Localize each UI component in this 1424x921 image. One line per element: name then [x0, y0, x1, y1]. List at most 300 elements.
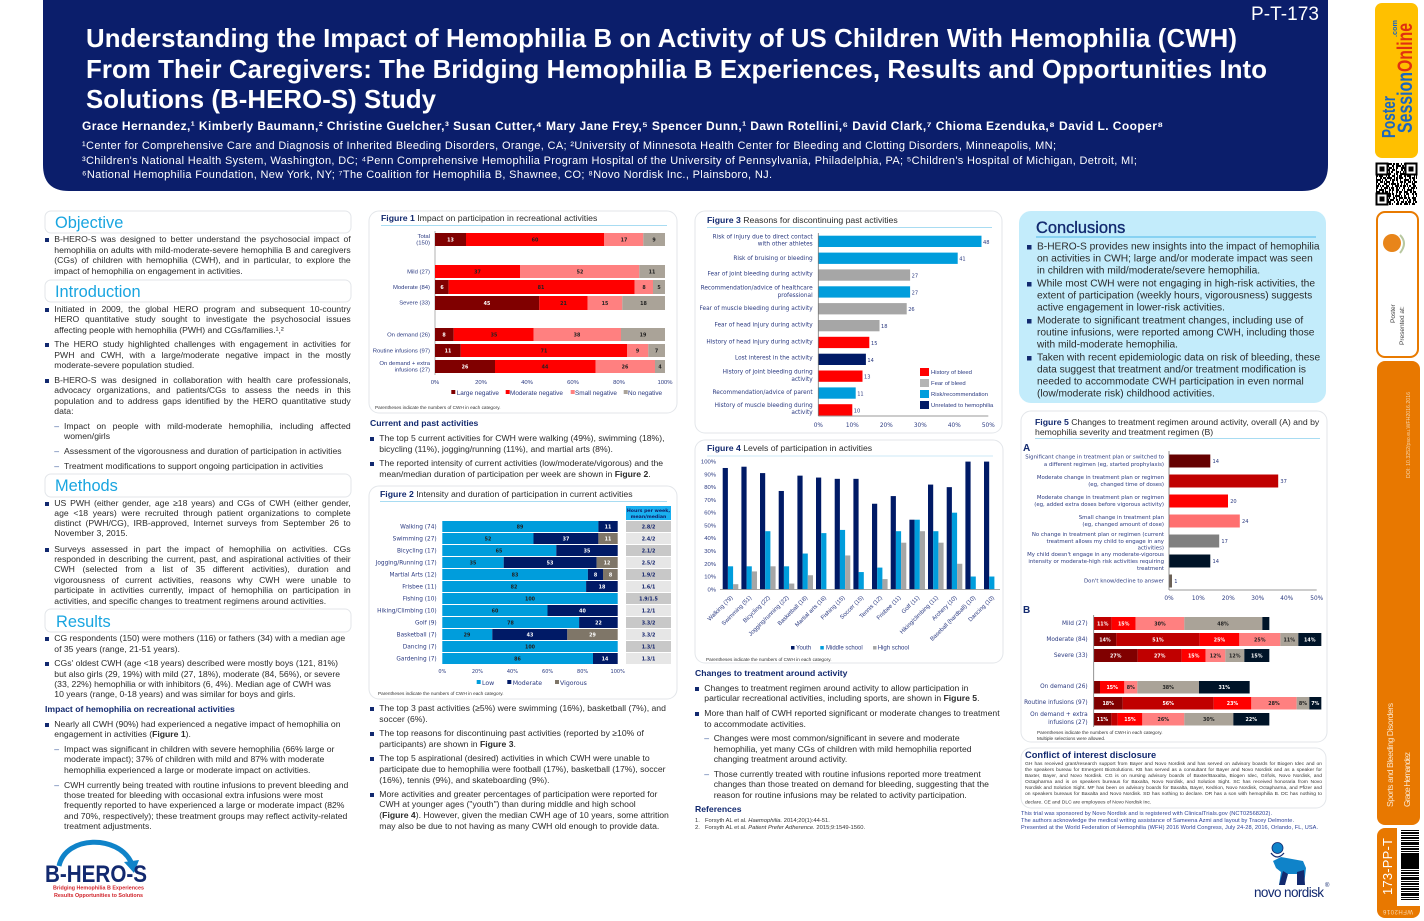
introduction text: population and to address gaps identified by the HERO quantitative study — [54, 396, 351, 406]
figure 4 category labels: Basketball (18) — [777, 595, 809, 627]
figure 5A labels: My child doesn't engage in any moderate-vigorous — [1027, 552, 1164, 558]
panel: introduction — [45, 280, 351, 471]
figure 4 category labels: Jogging/running (22) — [748, 595, 790, 638]
figure 2 legend: Low — [482, 680, 494, 687]
figure 2 stacked bars: 29 — [464, 633, 471, 639]
figure 3 labels: activity — [791, 410, 813, 416]
sidebar: PosterSessionOnline badge: Online — [1394, 23, 1417, 72]
figure 2 stacked bars: 14 — [602, 657, 609, 663]
impact text: – — [54, 744, 59, 754]
conflict text: declare. CE and DLC are employees of Novo Nordisk Inc. — [1025, 799, 1151, 805]
methods text: responded in describing the current, past, and aspirational activities of their — [54, 554, 351, 564]
header banner — [43, 0, 1328, 191]
figure 1 stacked bars: 17 — [621, 238, 627, 244]
figure 5B bars: 51% — [1152, 638, 1164, 644]
figure 4 category labels: Swimming (51) — [721, 595, 753, 627]
figure 5B labels: On demand (26) — [1040, 684, 1088, 690]
introduction text: Treatment modifications to support ongoing participation in activities — [64, 461, 323, 471]
heading: introduction: Introduction — [55, 283, 141, 301]
figure 4 y axis: 20% — [704, 562, 717, 568]
introduction text: – — [54, 461, 59, 471]
figure 5A axis — [1164, 451, 1324, 602]
methods text: participate in activities currently, impact of hemophilia on participation in — [54, 584, 351, 594]
figure 2 note: Parentheses indicate the numbers of CWH in each category. — [378, 691, 504, 696]
figure 1 stacked bars: 44 — [542, 364, 549, 370]
panel: figure 4 — [695, 440, 1003, 663]
figure 1 row labels: infusions (27) — [395, 368, 430, 374]
figure 1 x axis: 0% — [431, 380, 440, 386]
logo: B-HERO-S: B-HERO-S — [45, 861, 147, 888]
figure 3 labels: Fear of muscle bleeding during activity — [700, 306, 813, 312]
figure 1 x axis: 100% — [657, 380, 673, 386]
sidebar: presented at box: Poster — [1390, 303, 1397, 323]
figure 5A axis: 20% — [1222, 596, 1235, 602]
objective text: hemophilia on adults with mild-moderate-severe hemophilia B and caregivers — [54, 244, 351, 254]
conflict text: on speakers bureaus for Baxalta and Novo Nordisk. SD has nothing to declare. DR has a son with hemophilia B. DC has nothing to — [1025, 792, 1322, 797]
conflict text: GH has received grant/research support from Bayer and Novo Nordisk and has served on advisory boards for Biogen Idec and on — [1025, 762, 1322, 767]
figure 5B bars: 27% — [1154, 654, 1166, 660]
text: past activities: soccer (6%). — [379, 714, 428, 724]
figure 5A labels: Moderate change in treatment plan or regimen — [1037, 475, 1164, 481]
figure 5A bars: 17 — [1221, 539, 1228, 545]
figure 2 stacked bars: 18 — [599, 585, 606, 591]
figure 1 stacked bars: 71 — [541, 348, 547, 354]
figure 3 labels: History of muscle bleeding during — [715, 403, 813, 409]
hours per week table: mean/median — [631, 514, 666, 520]
figure 5B bars: 11% — [1097, 717, 1108, 723]
figure 5B bars: 11% — [1284, 638, 1295, 644]
figure 5 title: Figure 5 Changes to treatment regimen around activity, overall (A) and by — [1035, 417, 1320, 427]
figure 5B bars: 15% — [1118, 622, 1130, 628]
hours per week table: 1.9/1.5 — [639, 597, 658, 603]
figure 4 category labels — [707, 595, 996, 643]
methods text: vigorousness of current activities, reasons why CWH were unable to — [54, 574, 351, 584]
text: changes to treatment around activity: – — [704, 769, 709, 779]
figure 2 title: Figure 2 Intensity and duration of participation in current activities — [380, 489, 633, 499]
text: past activities — [370, 703, 669, 831]
conclusions text: routine infusions, were reported among CWH, including those — [1037, 328, 1315, 338]
figure 5B bars: 7% — [1311, 701, 1320, 707]
figure 3 bars: 48 — [983, 240, 989, 246]
introduction text: Impact on people with mild-moderate hemophilia, including affected — [64, 420, 351, 430]
figure 3 labels: Fear of head injury during activity — [714, 323, 813, 329]
figure 2 x axis: 100% — [611, 669, 625, 675]
figure 1 note: Parentheses indicate the numbers of CWH in each category. — [375, 405, 500, 410]
figure 5B bars: 18% — [1102, 701, 1114, 707]
figure 1 stacked bars: 52 — [577, 270, 583, 276]
hours per week table: 1.2/1 — [642, 609, 655, 615]
figure 1 x axis: 20% — [475, 380, 488, 386]
figure 3 labels: Risk of injury due to direct contact — [713, 235, 813, 241]
title: Understanding the Impact of Hemophilia B on Activity of US Children With Hemophilia (CWH) — [86, 25, 1237, 53]
figure 5A axis: 10% — [1192, 596, 1205, 602]
panel: figure 5 — [1021, 411, 1327, 742]
figure 3 bars: 13 — [864, 375, 870, 381]
text: changes to treatment around activity: Changes to treatment regimen around activity to allow participation in — [704, 683, 969, 693]
figure 5A labels — [1025, 455, 1165, 585]
figure 2 row labels: Fishing (10) — [403, 596, 437, 602]
figure 1 stacked bars: 11 — [445, 348, 451, 354]
introduction text — [45, 304, 351, 471]
figure 5A labels: a different regimen (eg, started prophylaxis) — [1044, 462, 1164, 468]
references — [695, 804, 865, 831]
conclusions text: in children with mild/moderate/severe hemophilia. — [1037, 266, 1260, 276]
figure 2 stacked bars: 60 — [492, 609, 499, 615]
figure 1 x axis: 80% — [613, 380, 626, 386]
results text: 10 years (range, 0-18 years) and was similar for boys and girls. — [54, 689, 295, 699]
impact text — [45, 719, 349, 831]
introduction text: Assessment of the vigorousness and duration of participation in activities — [64, 446, 342, 456]
figure 2 stacked bars: 11 — [605, 525, 611, 531]
figure 3 bars: 10 — [854, 408, 860, 414]
objective text — [45, 234, 351, 276]
methods text: CWH (selected from a list of 35 different activities), duration and — [54, 564, 351, 574]
text: current and past activities: Current and past activities — [370, 418, 479, 428]
figure 5A bars: 14 — [1212, 559, 1219, 565]
figure 3 legend: Risk/recommendation — [931, 392, 988, 398]
text: changes to treatment around activity: – — [704, 733, 709, 743]
figure 5B bars: 14% — [1099, 638, 1111, 644]
figure 5B bars: 25% — [1254, 638, 1266, 644]
figure 1 stacked bars: 35 — [491, 332, 497, 338]
figure 4 category labels: Frisbee (11) — [876, 595, 902, 622]
figure 4 legend: Youth — [796, 646, 811, 652]
sidebar: poster ID and barcode: WFH2016 — [1382, 908, 1413, 914]
figure 5A labels: treatment — [1137, 566, 1164, 572]
figure 3 labels: Recommendation/advice of healthcare — [701, 286, 813, 292]
figure 2 row labels: Bicycling (17) — [397, 548, 437, 554]
conclusions text: Taken with recent epidemiologic data on risk of bleeding, these — [1037, 352, 1320, 364]
figure 2 stacked bars: 86 — [514, 657, 521, 663]
introduction text: The HERO study highlighted challenges with engagement in activities for — [54, 338, 351, 348]
figure 5B bars: 15% — [1251, 654, 1263, 660]
figure 2 legend: Vigorous — [560, 680, 587, 687]
sidebar: PosterSessionOnline badge: .com — [1392, 20, 1399, 37]
conclusions text: extent of participation (weekly hours, vigorousness) suggests — [1037, 290, 1312, 302]
figure 2 x axis: 20% — [472, 669, 483, 675]
figure 2 row labels — [375, 524, 437, 662]
figure 2 x axis: 80% — [577, 669, 588, 675]
introduction text: – — [54, 421, 59, 431]
figure 1 stacked bars: 38 — [574, 332, 581, 338]
figure 4 category labels: Martial arts (16) — [794, 595, 828, 629]
figure 3 labels: Lost interest in the activity — [735, 356, 813, 362]
figure 5A bars: 20 — [1230, 499, 1237, 505]
figure 2 stacked bars: 89 — [517, 525, 524, 531]
figure 1 stacked bars: 6 — [440, 285, 444, 291]
figure 5A axis: 40% — [1280, 596, 1294, 602]
text: changes to treatment around activity: Changes to treatment around activity — [695, 668, 848, 678]
logo: novo nordisk — [1254, 842, 1330, 900]
impact text: those treated for bleeding with occasional extra infusions were most — [64, 790, 323, 800]
figure 2 row labels: Hiking/Climbing (10) — [377, 608, 437, 614]
introduction text: PWH and CWH, with a large/moderate negative impact in the mostly — [54, 350, 351, 360]
figure 5A labels: (eg, added extra doses before vigorous activity) — [1034, 502, 1164, 508]
conclusions text: B-HERO-S provides new insights into the impact of hemophilia — [1037, 242, 1320, 252]
figure 4 y axis: 90% — [704, 472, 717, 478]
figure 2 x axis: 60% — [542, 669, 553, 675]
methods text: activities, and specific changes to treatment regimens around activities. — [54, 596, 326, 606]
figure 5B bars: 12% — [1229, 654, 1241, 660]
references: References — [695, 804, 742, 814]
figure 3 labels: Recommendation/advice of parent — [712, 390, 813, 396]
impact text: moderate impact); 37% of children with mild and 87% with moderate — [64, 754, 325, 764]
hours per week table: 2.5/2 — [642, 561, 655, 567]
figure 2 row labels: Jogging/Running (17) — [375, 560, 437, 566]
methods text: Surveys assessed in part the impact of hemophilia on activities. CGs — [54, 544, 351, 554]
figure 5B bars: 8% — [1299, 701, 1307, 707]
figure 5A bars: 24 — [1242, 519, 1248, 525]
panel: figure 2 — [369, 486, 677, 699]
conclusions text: active engagement in lower-risk activities. — [1037, 302, 1225, 314]
figure 2 stacked bars: 43 — [527, 633, 533, 639]
figure 2 stacked bars: 29 — [589, 633, 596, 639]
figure 4 category labels: Golf (11) — [901, 595, 921, 615]
figure 2 row labels: Basketball (7) — [397, 632, 437, 638]
figure 2 x axis: 40% — [507, 669, 518, 675]
figure 3 bars: 27 — [912, 290, 918, 296]
figure 1 stacked bars: 13 — [447, 238, 454, 244]
figure 4 category labels: Walking (79) — [707, 595, 734, 623]
icon: WFH congress logo — [1383, 234, 1404, 253]
introduction text: B-HERO-S was designed in collaboration with health care professionals, — [54, 374, 351, 384]
figure 5A bars: 14 — [1212, 459, 1219, 465]
figure 1 title: Figure 1 Impact on participation in recreational activities — [381, 213, 598, 223]
figure 3 axis — [814, 233, 995, 429]
figure 1 row labels: On demand (26) — [387, 332, 430, 338]
impact text: frequently reported to have experienced a large or moderate impact (82% — [64, 800, 345, 810]
methods text: November 3, 2015. — [54, 528, 128, 538]
conclusions text — [1027, 242, 1320, 400]
figure 2 row labels: Frisbee (11) — [402, 584, 437, 590]
figure 3 axis: 10% — [846, 423, 859, 429]
panel: results — [45, 609, 351, 831]
objective text: B-HERO-S was designed to better understand the psychosocial impact of — [54, 234, 351, 244]
objective text: (CGs) of children with hemophilia (CWH), and in particular, to explore the — [54, 254, 351, 264]
hours per week table: 2.1/2 — [642, 549, 655, 555]
figure 2 stacked bars: 12 — [604, 561, 610, 567]
introduction text: affecting people with hemophilia (PWH) and CGs/families.¹,² — [54, 325, 284, 335]
figure 2 stacked bars: 37 — [563, 537, 569, 543]
figure 2 row labels: Walking (74) — [400, 524, 437, 530]
introduction text: moderate-severe population studied. — [54, 360, 194, 370]
section B label: B — [1023, 605, 1030, 616]
figure 5B bars: 15% — [1188, 654, 1200, 660]
text: changes to treatment around activity: particular recreational activities, including sports, are shown in Figure 5. — [704, 693, 979, 703]
conclusions text: (low/moderate risk) childhood activities. — [1037, 388, 1215, 400]
figure 5A labels: Moderate change in treatment plan or regimen — [1037, 495, 1164, 501]
figure 1 stacked bars: 19 — [640, 332, 647, 338]
sidebar: poster ID and barcode — [1377, 827, 1424, 918]
figure 1 row labels: Severe (33) — [399, 300, 430, 306]
figure 1 row labels: On demand + extra — [379, 361, 431, 367]
text: changes to treatment around activity: changes than those treated on demand for bleeding, suggesting that the — [714, 779, 989, 789]
figure 5A axis: 30% — [1251, 596, 1265, 602]
figure 4 y axis — [701, 460, 717, 593]
text: past activities: (Figure 4). However, given the median CWH age of 10 years, some attrition — [379, 810, 669, 820]
methods text: age <18 years) were recruited through patient organizations to complete — [54, 508, 351, 518]
figure 5B labels: Routine infusions (97) — [1024, 700, 1088, 706]
text: past activities: may also be due to not having as many CWH old enough to provide data. — [379, 821, 659, 831]
figure 1 stacked bars: 60 — [532, 238, 539, 244]
figure 5B bars: 8% — [1127, 685, 1135, 691]
sidebar: presented at box — [1377, 212, 1418, 357]
figure 3 bars: 26 — [908, 307, 915, 313]
hours per week table: 1.3/1 — [642, 657, 655, 663]
figure 5B bars — [1094, 617, 1321, 726]
impact text: engagement in activities (Figure 1). — [54, 729, 191, 739]
text: current and past activities: mean/median duration of participation per week are shown in Figure 2. — [379, 469, 651, 479]
figure 4 note: Parentheses indicate the numbers of CWH in each category. — [706, 657, 832, 662]
title — [86, 25, 1267, 114]
sidebar: orange category panel: Sports and Bleeding Disorders — [1385, 703, 1395, 807]
figure 5B bars: 15% — [1106, 685, 1118, 691]
figure 3 legend: Unrelated to hemophilia — [931, 403, 994, 409]
figure 2 row labels: Martial Arts (12) — [389, 572, 437, 578]
figure 5B labels: Moderate (84) — [1046, 637, 1088, 643]
figure 5 title: hemophilia severity and treatment regimen (B) — [1035, 427, 1213, 437]
references: Forsyth AL et al. Patient Prefer Adherence. 2015;9:1549-1560. — [705, 825, 865, 831]
results text: of 35 years (range, 21-51 years). — [54, 644, 180, 654]
figure 5B bars: 30% — [1203, 717, 1215, 723]
figure 2 stacked bars: 35 — [584, 549, 590, 555]
figure 2 x axis — [438, 669, 625, 675]
figure 2 stacked bars: 22 — [595, 621, 602, 627]
introduction text: Initiated in 2009, the global HERO program and subsequent 10-country — [54, 304, 351, 314]
figure 1 row labels: (150) — [416, 240, 430, 246]
figure 3 labels: with other athletes — [758, 242, 813, 248]
affiliations — [82, 140, 1137, 181]
results text: but also girls (29, 19%) with mild (27, 18%), moderate (84, 56%), or severe — [54, 669, 340, 679]
figure 3 title: Figure 3 Reasons for discontinuing past activities — [707, 215, 898, 225]
figure 2 row labels: Gardening (7) — [396, 656, 437, 662]
sponsorship and acknowledgements: Presented at the World Federation of Hemophilia (WFH) 2016 World Congress, July 24-28, 2016, Orlando, FL, USA. — [1021, 825, 1318, 831]
figure 3 bars — [818, 236, 989, 416]
authors: Grace Hernandez,¹ Kimberly Baumann,² Christine Guelcher,³ Susan Cutter,⁴ Mary Jane Frey,⁵ Spencer Dunn,¹ Dawn Rotellini,⁶ David Clark,⁷ Chioma Ezenduka,⁸ David L. Cooper⁸ — [82, 119, 1163, 133]
figure 3 labels: History of joint bleeding during — [723, 370, 813, 376]
figure 4 legend — [791, 646, 909, 652]
text: changes to treatment around activity: More than half of CWH reported significant or moderate changes to treatment — [704, 708, 1000, 718]
figure 2 stacked bars: 53 — [547, 561, 553, 567]
figure 3 labels: History of head injury during activity — [706, 340, 813, 346]
text: current and past activities: The top 5 current activities for CWH were walking (49%), swimming (18%), — [379, 433, 665, 443]
figure 1 x axis: 60% — [567, 380, 580, 386]
results text: CGs' oldest CWH (age <18 years) described were mostly boys (121, 81%) — [54, 658, 338, 668]
conflict text — [1025, 761, 1322, 805]
conclusions text: data suggest that treatment and/or treatment modification is — [1037, 364, 1306, 376]
figure 5B bars: 22% — [1246, 717, 1257, 723]
title: From Their Caregivers: The Bridging Hemophilia B Experiences, Results and Opportunities Into — [86, 56, 1267, 84]
figure 1 x axis: 40% — [521, 380, 534, 386]
results text: CG respondents (150) were mothers (116) or fathers (34) with a median age — [54, 633, 345, 643]
hours per week table — [626, 506, 671, 664]
figure 1 row labels: Total — [418, 234, 430, 240]
figure 5B bars: 27% — [1110, 654, 1122, 660]
figure 4 y axis: 10% — [704, 574, 717, 580]
figure 4 legend: Middle school — [826, 646, 863, 652]
hours per week table: Hours per week, — [627, 508, 670, 514]
heading: objective: Objective — [55, 214, 123, 232]
figure 2 stacked bars: 65 — [496, 549, 502, 555]
figure 1 legend: Small negative — [575, 390, 617, 397]
figure 1 stacked bars: 9 — [652, 238, 656, 244]
figure 5B bars: 12% — [1210, 654, 1221, 660]
text: changes to treatment around activity — [695, 668, 1000, 800]
figure 3 bars: 27 — [912, 274, 918, 280]
conflict heading: Conflict of interest disclosure — [1025, 750, 1156, 760]
sidebar: orange category panel: DOI: 10.3252/pso.eu.WFH2016.2016 — [1406, 392, 1412, 478]
figure 4 grouped bars — [723, 462, 994, 589]
objective text: impact of hemophilia on engagement in activities. — [54, 266, 243, 276]
figure 5B bars: 38% — [1162, 685, 1174, 691]
sponsorship and acknowledgements: This trial was sponsored by Novo Nordisk and is registered with ClinicalTrials.gov (NCT02568202). — [1021, 811, 1272, 817]
text: current and past activities — [370, 418, 665, 479]
introduction text: advocacy organizations, and patients/CGs to assess the needs in this — [54, 384, 351, 394]
figure 4 y axis: 30% — [704, 549, 717, 555]
figure 3 legend: History of bleed — [931, 370, 972, 376]
heading: methods: Methods — [55, 477, 118, 495]
figure 1 row labels: Routine infusions (97) — [373, 348, 430, 354]
figure 2 stacked bars: 100 — [525, 645, 536, 651]
figure 1 stacked bars: 81 — [538, 285, 544, 291]
introduction text: – — [54, 446, 59, 456]
conflict text: Nordisk and Solution Sight. MF has been on advisory boards for Baxalta, Bayer, Kedrion, Novo Nordisk, Octapharma, and Pfizer and — [1025, 786, 1322, 791]
figure 1 row labels: Moderate (84) — [393, 285, 430, 291]
figure 3 labels: Risk of bruising or bleeding — [733, 256, 813, 262]
figure 4 y axis: 100% — [701, 460, 717, 466]
figure 2 stacked bars: 8 — [609, 573, 613, 579]
panel: figure 3 — [695, 211, 1002, 433]
panel: objective — [45, 211, 351, 276]
figure 5B bars: 31% — [1219, 685, 1230, 691]
figure 5A labels: Don't know/decline to answer — [1084, 579, 1165, 585]
figure 2 stacked bars: 8 — [594, 573, 598, 579]
figure 2 stacked bars: 82 — [511, 585, 517, 591]
figure 5B bars: 11% — [1097, 622, 1109, 628]
sidebar: presented at box: Presented at: — [1399, 306, 1406, 345]
figure 1 stacked bars: 7 — [655, 348, 658, 354]
figure 5A labels: activities) — [1138, 546, 1164, 552]
figure 2 legend: Moderate — [513, 680, 542, 687]
impact text: and 70%, respectively); these treatment groups may reflect activity-related — [64, 811, 348, 821]
introduction text: HERO quantitative study sought to investigate the psychosocial issues — [54, 314, 351, 324]
figure 3 bars: 15 — [871, 341, 877, 347]
logo: B-HERO-S — [45, 842, 147, 899]
sponsorship and acknowledgements: The authors acknowledge the medical writing assistance of Sameena Azmi and layout by Tracey Delmonte. — [1021, 818, 1294, 824]
figure 2 stacked bars: 35 — [470, 561, 476, 567]
impact text: hemophilia experienced a large or moderate impact on activities. — [64, 765, 310, 775]
figure 3 bars: 41 — [959, 257, 966, 263]
figure 3 axis: 40% — [948, 423, 961, 429]
heading: results: Results — [56, 613, 111, 631]
conflict text: the speakers bureau for Emergent BioSolutions. KB has served as a consultant for Bayer and Novo Nordisk and as a speaker for — [1025, 768, 1322, 773]
sponsorship and acknowledgements — [1021, 811, 1318, 831]
methods text: distinct (PWH/CG), IRB-approved, Internet surveys from September 26 to — [54, 518, 351, 528]
conclusions text: on activities in CWH; large and/or moderate impact was seen — [1037, 254, 1313, 264]
affiliations: ⁶National Hemophilia Foundation, New York, NY; ⁷The Coalition for Hemophilia B, Shawnee, CO; ⁸Novo Nordisk Inc., Plainsboro, NJ. — [82, 169, 772, 181]
text: changes to treatment around activity: hemophilia, yet many CGs of children with mild hemophilia reported — [714, 744, 972, 754]
figure 4 y axis: 60% — [704, 511, 717, 517]
conclusions text: needed to accommodate CWH participation in even normal — [1037, 376, 1304, 388]
impact text: Nearly all CWH (90%) had experienced a negative impact of hemophilia on — [54, 719, 341, 729]
impact text: Impact was significant in children with severe hemophilia (66% large or — [64, 744, 335, 754]
sidebar: PosterSessionOnline badge: Session — [1394, 72, 1417, 133]
figure 3 axis: 0% — [814, 423, 823, 429]
hours per week table: 2.8/2 — [642, 525, 655, 531]
figure 5B labels: infusions (27) — [1048, 720, 1088, 726]
text: past activities: participate due to hemophilia were football (17%), basketball (17%), soccer — [379, 764, 666, 774]
figure 1 legend: Large negative — [457, 390, 499, 397]
